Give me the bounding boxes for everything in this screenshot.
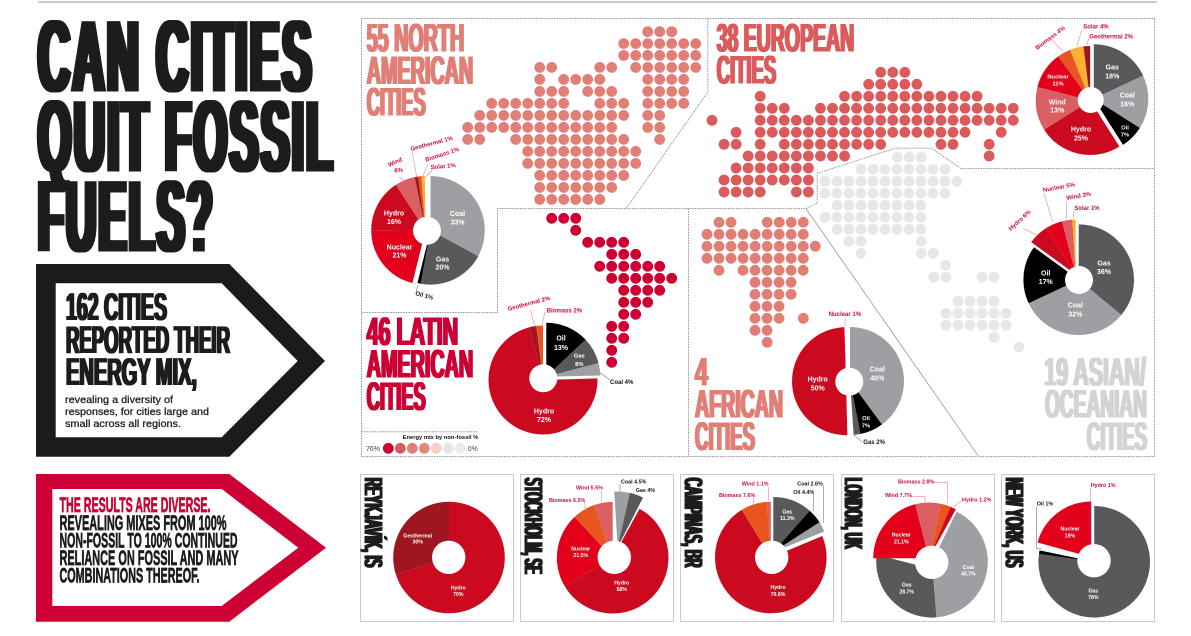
pie: Asia and Oceania: Hydro 6% xyxy=(1008,209,1033,232)
panel: Campinas: Wind 1.1% xyxy=(742,482,769,488)
panel: New York: Nuclear xyxy=(1060,527,1080,533)
pie: Europe: Biomass 4% xyxy=(1035,25,1067,52)
panel: New York: 78% xyxy=(1088,595,1099,601)
text: QUIT FOSSIL xyxy=(38,80,335,194)
panel: Reykjavik: Hydro xyxy=(451,586,466,592)
heading: 38 European cities xyxy=(717,17,854,92)
map: Asia and Oceania dots xyxy=(825,157,1019,347)
panel: Campinas: Gas xyxy=(782,510,792,516)
pie: Europe: Oil xyxy=(1121,125,1129,131)
pie: Europe: Solar 4% xyxy=(1083,24,1109,30)
panel: Campinas: Coal 2.6% xyxy=(797,482,823,488)
pie: Asia and Oceania: Solar 1% xyxy=(1074,206,1100,212)
panel: Campinas: 11.3% xyxy=(780,516,795,522)
panel: Stockholm: Gas 4% xyxy=(636,488,655,494)
panel: London: Gas xyxy=(902,583,912,589)
pie: Latin America xyxy=(507,296,634,424)
callout: 162 cities: REPORTED THEIR xyxy=(66,319,230,362)
pie: North America: Biomass 1% xyxy=(425,147,461,164)
heading: 55 North American cities: CITIES xyxy=(367,81,426,125)
panel: Reykjavik: 70% xyxy=(453,592,464,598)
panel: Campinas: Biomass 7.6% xyxy=(719,493,755,499)
panel: London: Hydro 1.2% xyxy=(962,498,992,504)
pie: Africa: Oil xyxy=(862,416,870,422)
pie: Europe: Hydro xyxy=(1071,127,1091,134)
panel: Stockholm: Hydro xyxy=(614,581,629,587)
pie: Asia and Oceania xyxy=(1008,182,1112,319)
heading: 4 African cities: 4 xyxy=(695,351,708,395)
legend: energy mix by non-fossil %: Energy mix by non-fossil % xyxy=(403,435,478,441)
pie: Latin America: Gas xyxy=(574,354,585,360)
pie: North America: Oil 1% xyxy=(414,291,434,302)
pie: North America: 33% xyxy=(450,220,465,226)
pie: Latin America: 8% xyxy=(575,362,583,368)
pie: North America: 16% xyxy=(387,219,402,226)
pie: Asia and Oceania: 17% xyxy=(1039,279,1053,286)
legend: energy mix by non-fossil %: 76% xyxy=(366,446,380,453)
panel: Campinas: Hydro xyxy=(770,585,786,591)
callout: 162 cities: 162 CITIES xyxy=(66,286,167,329)
panel: Reykjavik: Geothermal xyxy=(403,534,433,540)
pie: Latin America: Geothermal 2% xyxy=(507,296,552,313)
callout: 162 cities: ENERGY MIX, xyxy=(66,351,197,394)
pie: Latin America: Hydro xyxy=(534,409,554,416)
pie: North America: Wind xyxy=(388,157,404,169)
pie: Africa: Hydro xyxy=(808,377,828,384)
pie: Europe: 18% xyxy=(1105,73,1120,80)
panel: New York: Oil 1% xyxy=(1037,502,1053,508)
pie: Europe: Wind xyxy=(1049,99,1066,106)
pie: Asia and Oceania: Coal xyxy=(1068,303,1083,310)
callout: results are diverse: REVEALING MIXES FROM 100% xyxy=(60,512,227,535)
panel: London: Coal xyxy=(963,565,974,571)
heading: 4 African cities xyxy=(695,351,783,459)
pie: Asia and Oceania: Oil xyxy=(1041,271,1050,278)
region borders xyxy=(362,18,1154,456)
pie: Africa: 7% xyxy=(862,424,870,430)
text: CAN CITIES xyxy=(38,0,314,114)
pie: Europe xyxy=(1035,24,1135,143)
heading: 55 North American cities: 55 NORTH xyxy=(367,17,464,61)
pie: North America: Solar 1% xyxy=(430,163,457,171)
panel: New York: 19% xyxy=(1065,533,1076,539)
pie: Europe: 16% xyxy=(1120,102,1135,109)
heading: 46 Latin American cities xyxy=(367,310,473,419)
panel: Campinas: 70.6% xyxy=(771,592,786,598)
title: FUELS? xyxy=(38,160,215,274)
callout: results are diverse xyxy=(36,474,326,622)
pie: Asia and Oceania: Gas xyxy=(1097,261,1111,268)
legend: energy mix by non-fossil % xyxy=(366,435,478,454)
panel: New York: Hydro 1% xyxy=(1091,483,1116,489)
pie: North America: 6% xyxy=(394,168,404,174)
pie: Africa: 50% xyxy=(811,386,825,393)
panel: Reykjavik: 30% xyxy=(413,540,423,546)
panel: London: 28.7% xyxy=(899,589,914,595)
panel: London: 21.1% xyxy=(894,539,909,545)
panel: Stockholm: Coal 4.5% xyxy=(621,480,647,486)
heading: 46 Latin American cities: 46 LATIN xyxy=(367,310,458,354)
pie: Latin America: Coal 4% xyxy=(610,380,634,386)
map: North America dots xyxy=(468,32,696,199)
pie: North America xyxy=(384,136,465,302)
pie: North America: Coal xyxy=(450,211,465,218)
pie: Asia and Oceania: 32% xyxy=(1068,312,1083,319)
callout: results are diverse: NON-FOSSIL TO 100% CONTINUED xyxy=(60,530,237,552)
panel: London xyxy=(838,474,994,622)
legend: energy mix by non-fossil %: 0% xyxy=(468,446,478,453)
pie: Europe: Coal xyxy=(1120,93,1135,100)
panel: Stockholm: 58% xyxy=(617,587,627,593)
panel: Reykjavik xyxy=(358,474,514,622)
pie: North America: 20% xyxy=(435,264,450,272)
panel: Stockholm: Wind 5.5% xyxy=(576,486,603,492)
pie: Europe: Gas xyxy=(1106,64,1119,71)
panel: New York: Gas xyxy=(1088,588,1098,594)
panel: Stockholm: Nuclear xyxy=(571,547,590,553)
panel: Stockholm: Biomass 6.5% xyxy=(549,498,585,504)
callout: results are diverse: THE RESULTS ARE DIVERSE. xyxy=(60,494,210,517)
pie: Africa xyxy=(808,312,886,446)
map: Latin America dots xyxy=(552,218,672,362)
title xyxy=(38,0,335,274)
callout: 162 cities xyxy=(36,264,325,457)
pie: Europe: Nuclear xyxy=(1047,75,1069,81)
heading: 55 North American cities xyxy=(367,17,473,125)
pie: North America: Hydro xyxy=(384,210,404,218)
pie: Africa: Gas 2% xyxy=(863,440,886,446)
heading: 38 European cities: CITIES xyxy=(717,48,776,92)
callout: results are diverse: COMBINATIONS THEREOF. xyxy=(60,564,200,588)
heading: 19 Asian/Oceanian cities xyxy=(1044,351,1147,459)
pie: Latin America: 72% xyxy=(537,417,552,424)
panel: Campinas: Oil 4.4% xyxy=(793,490,814,496)
panel: London: Biomass 2.8% xyxy=(898,480,934,486)
heading: 4 African cities: CITIES xyxy=(695,415,755,459)
text: AMERICAN xyxy=(367,49,473,93)
pie: Latin America: 13% xyxy=(554,345,569,352)
pie: North America: Geothermal 1% xyxy=(410,136,454,153)
panel: New York xyxy=(1000,474,1154,622)
map: Europe dots xyxy=(712,72,1013,192)
callout: 162 cities: responses, for cities large and xyxy=(65,406,209,418)
pie: Europe: Geothermal 2% xyxy=(1089,34,1134,40)
pie: Africa: Coal xyxy=(870,367,885,374)
pie: Latin America: Biomass 2% xyxy=(547,308,583,314)
panel: Stockholm: 21.5% xyxy=(573,553,588,559)
panel: London: Nuclear xyxy=(892,533,911,539)
pie: Latin America: Oil xyxy=(556,336,566,343)
panel: Campinas xyxy=(678,474,834,622)
pie: North America: Gas xyxy=(436,256,449,264)
panel: London: Wind 7.7% xyxy=(885,493,912,499)
panel: London: 40.7% xyxy=(961,572,976,578)
panel: Stockholm xyxy=(518,474,674,622)
text: AFRICAN xyxy=(695,382,783,426)
text: AMERICAN xyxy=(367,343,473,387)
pie: Europe: 7% xyxy=(1121,132,1129,138)
pie: Asia and Oceania: Wind 3% xyxy=(1066,192,1092,202)
pie: Europe: 25% xyxy=(1074,136,1089,143)
pie: Europe: 13% xyxy=(1050,108,1065,115)
map: Africa dots xyxy=(707,222,815,342)
pie: Africa: 40% xyxy=(870,376,885,383)
text: 38 EUROPEAN xyxy=(717,17,854,61)
callout: 162 cities: small across all regions. xyxy=(65,418,181,430)
pie: Africa: Nuclear 1% xyxy=(829,312,862,318)
callout: 162 cities: revealing a diversity of xyxy=(65,394,173,406)
pie: North America: Nuclear xyxy=(387,244,413,252)
heading: 46 Latin American cities: CITIES xyxy=(367,375,426,419)
pie: Asia and Oceania: Nuclear 5% xyxy=(1043,182,1076,194)
callout: results are diverse: RELIANCE ON FOSSIL AND MANY xyxy=(60,547,238,570)
pie: Europe: 11% xyxy=(1052,81,1064,87)
pie: North America: 21% xyxy=(392,252,407,260)
pie: Asia and Oceania: 36% xyxy=(1097,269,1112,276)
